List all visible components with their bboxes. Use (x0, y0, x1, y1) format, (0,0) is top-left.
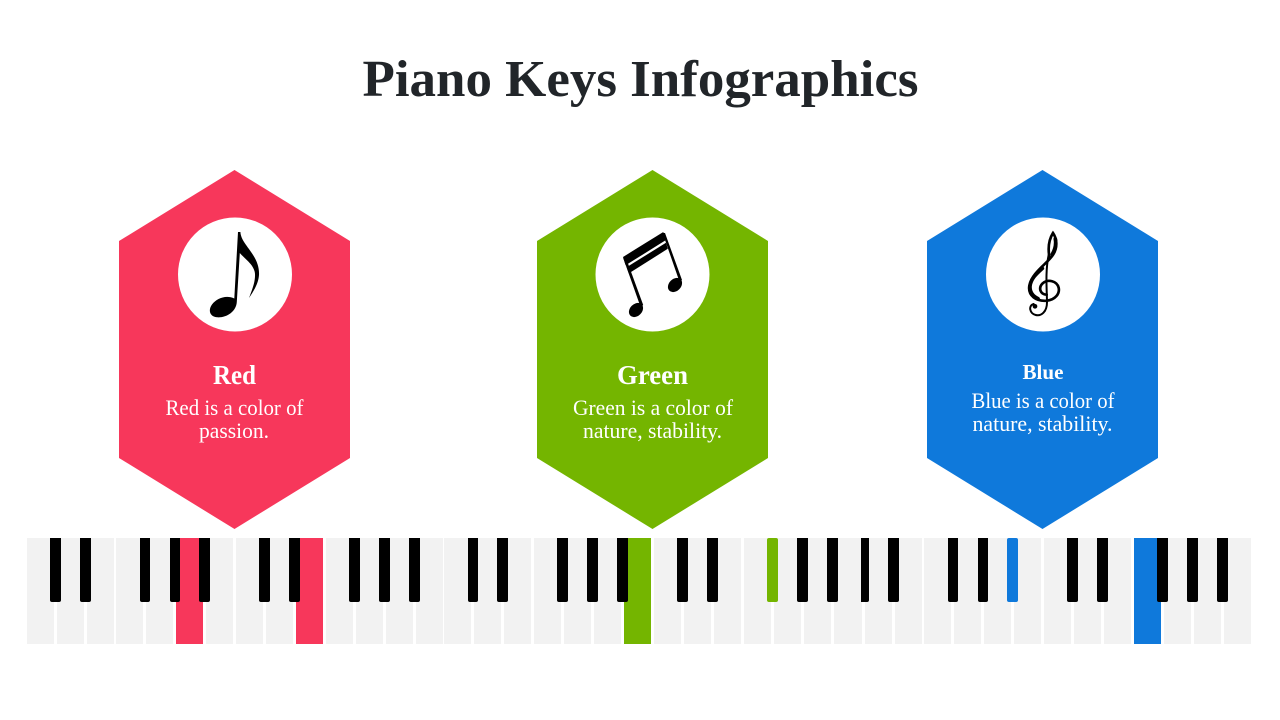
black keys (50, 538, 1228, 602)
blue description: Blue is a color of (972, 388, 1115, 413)
icon: beamed notes (596, 218, 710, 332)
green heading: Green (617, 360, 688, 390)
red heading: Red (213, 360, 256, 390)
blue description (972, 388, 1115, 436)
red description: passion. (199, 418, 269, 443)
icon: eighth note (178, 218, 292, 332)
red description (166, 395, 304, 443)
panel: blue (927, 170, 1158, 529)
green description (573, 395, 734, 443)
icon: treble clef (986, 218, 1100, 332)
blue heading: Blue (1022, 360, 1064, 384)
panel: green (537, 170, 768, 529)
white keys (27, 538, 1251, 644)
piano keyboard (27, 538, 1251, 644)
green description: nature, stability. (583, 418, 722, 443)
red hexagon (119, 170, 350, 529)
green description: Green is a color of (573, 395, 734, 420)
panel: red (119, 170, 350, 529)
blue description: nature, stability. (972, 411, 1112, 436)
highlighted white keys (176, 538, 1161, 644)
title: Piano Keys Infographics (362, 51, 918, 108)
blue hexagon (927, 170, 1158, 529)
green hexagon (537, 170, 768, 529)
red description: Red is a color of (166, 395, 304, 420)
highlighted black keys (767, 538, 1018, 602)
